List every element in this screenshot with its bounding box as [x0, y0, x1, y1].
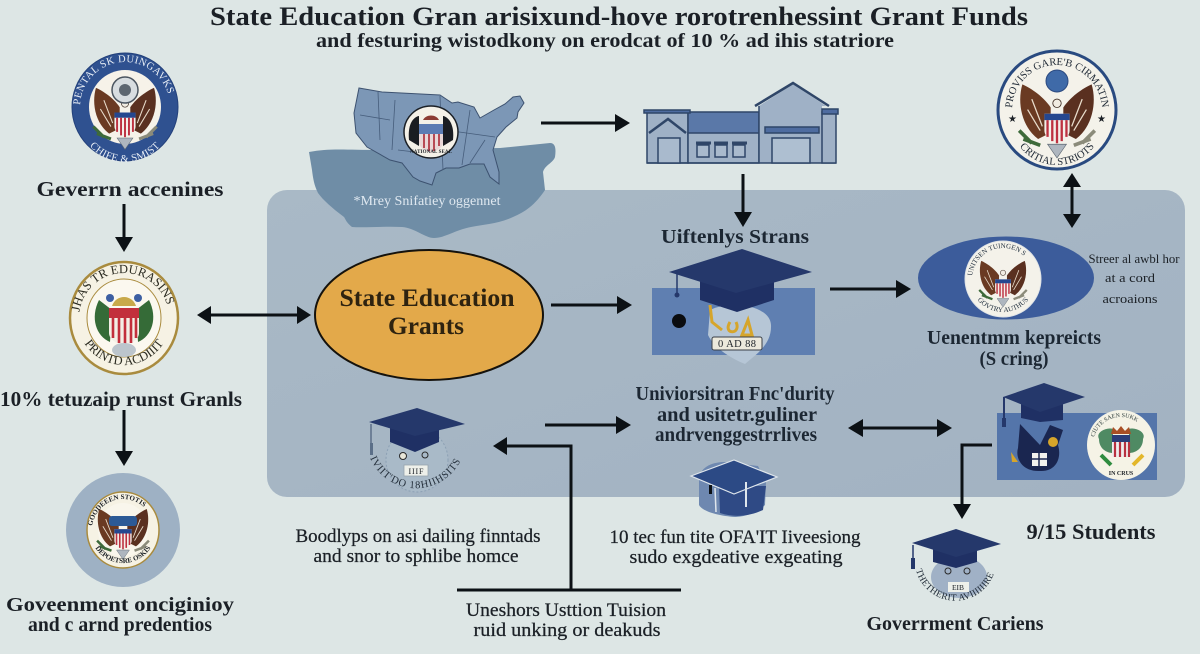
arrow: to university faculty	[545, 416, 631, 434]
arrow: tuition grants to government seal	[115, 410, 133, 466]
label: left bottom description	[296, 526, 540, 567]
label: students: 9/15 Students	[1026, 519, 1156, 544]
seal: government origin: GOODEEEN STOTIS	[88, 494, 146, 526]
label: government origin	[6, 595, 234, 636]
label: university faculty: and usitetr.guliner	[657, 404, 817, 426]
icon: cap with institute ring, left	[369, 408, 465, 492]
elbow arrow: right card to bottom cap	[953, 445, 992, 519]
seal: state education: PRINTD ACDIIIT	[84, 338, 162, 366]
label: middle bottom description	[610, 527, 861, 568]
map with federal seal	[309, 88, 555, 238]
elbow arrow: tuition line to left cap	[457, 437, 681, 590]
seal on card	[1087, 410, 1155, 480]
seal: top right federal: CRITIAL STRIOTS	[1021, 142, 1094, 165]
label: tuition: Uneshors Usttion Tuision	[466, 600, 667, 621]
double arrow: state seal to grants	[197, 306, 311, 324]
icon: graduation cap with blue card: 0 AD 88	[718, 339, 756, 350]
icon: cap with institute ring, bottom right: EIB	[952, 583, 964, 592]
icon: cap with institute ring, bottom right: THETHERIT AVIIIIIIRE	[916, 568, 994, 601]
seal: top right federal: ★	[1008, 114, 1017, 125]
map caption: *Mrey Snifatiey oggennet	[354, 194, 501, 209]
seal: top right federal: PROVISS GARE'B CIRMATIN	[1005, 58, 1109, 108]
seal: government origin: DEPOETSRE OSKIS	[95, 545, 150, 564]
label: government origin: and c arnd predentios	[28, 615, 212, 636]
label: university grants: Uiftenlys Strans	[661, 226, 809, 248]
icon: small seal on map	[404, 106, 458, 158]
seal: state education	[68, 260, 180, 376]
icon: graduation cap with blue card	[652, 249, 815, 364]
seal inside oval: UNITSEN TUINGEN S	[968, 243, 1026, 276]
seal: state education: JHAS TR EDURASINS	[72, 264, 174, 312]
icon: cap with institute ring, left: IIIF	[408, 467, 424, 476]
large central panel	[267, 190, 1185, 497]
grants ellipse	[315, 250, 543, 380]
icon: school building	[644, 83, 838, 163]
seal on card: CIUTE SAEN SUKK	[1091, 413, 1138, 436]
label: government recipients	[927, 328, 1101, 370]
arrow: grants to university	[551, 296, 632, 314]
icon: small seal on map: NATIONAL SEAL	[410, 150, 453, 155]
side note	[1088, 251, 1180, 306]
label: tuition	[466, 600, 667, 641]
side note: acroaions	[1102, 291, 1158, 306]
label: university faculty: Univiorsitran Fnc'durity	[636, 383, 834, 405]
grants ellipse: State Education	[340, 285, 515, 312]
icon: cap with institute ring, bottom right	[911, 529, 1001, 601]
seal: government origin	[66, 473, 180, 587]
arrow: building to university	[734, 174, 752, 227]
icon: water-like blob beneath map	[309, 143, 555, 238]
arrow: map to building	[541, 114, 630, 132]
grants ellipse: Grants	[388, 313, 464, 340]
label: middle bottom description: sudo exgdeative exgeating	[630, 547, 843, 568]
icon: USA map	[354, 88, 524, 185]
label: government recipients: (S cring)	[980, 349, 1048, 370]
seal: government agencies: PENTAL SK DUINGAVKS	[73, 55, 174, 105]
label: government origin: Goveenment onciginioy	[6, 595, 234, 616]
label: left bottom description: Boodlyps on asi dailing finntads	[296, 526, 540, 547]
arrow: agencies to state seal	[115, 204, 133, 252]
label: government agencies: Geverrn accenines	[36, 177, 223, 201]
label: tuition: ruid unking or deakuds	[474, 620, 660, 641]
side note: at a cord	[1105, 270, 1156, 285]
subtitle: and festuring wistodkony on erodcat of 10 % ad ihis statriore	[316, 31, 894, 52]
seal inside oval: GOVTRY AUTHUS	[978, 297, 1028, 312]
double arrow: faculty to right card	[848, 419, 952, 437]
label: left bottom description: and snor to sphlibe homce	[314, 546, 518, 567]
side note: Streer al awbl hor	[1088, 251, 1180, 266]
label: university faculty: andrvenggestrrlives	[655, 424, 817, 446]
double arrow: top right seal to blue oval	[1063, 173, 1081, 228]
seal inside oval	[964, 240, 1042, 318]
blue oval with seal	[918, 236, 1094, 320]
seal: government agencies: CHIFE & SMIST	[91, 142, 159, 162]
seal on card: IN CRUS	[1109, 471, 1134, 477]
label: middle bottom description: 10 tec fun tite OFA'IT Iiveesiong	[610, 527, 861, 548]
icon: cap with emblem card	[997, 383, 1157, 480]
label: government careers: Goverrment Cariens	[866, 613, 1044, 635]
label: university faculty	[636, 383, 834, 446]
label: tuition grants: 10% tetuzaip runst Granls	[0, 387, 242, 411]
icon: cap with institute ring, left: IVIIT'DO 18HIIHSITS	[370, 455, 460, 488]
icon: cap, middle	[691, 460, 777, 517]
arrow: university to blue oval	[830, 280, 911, 298]
label: government recipients: Uenentmm kepreicts	[927, 328, 1101, 349]
title: State Education Gran arisixund-hove rorotrenhessint Grant Funds	[210, 2, 1028, 31]
seal: top right federal	[996, 50, 1118, 170]
seal: government agencies	[72, 52, 178, 162]
seal: top right federal: ★	[1097, 114, 1106, 125]
